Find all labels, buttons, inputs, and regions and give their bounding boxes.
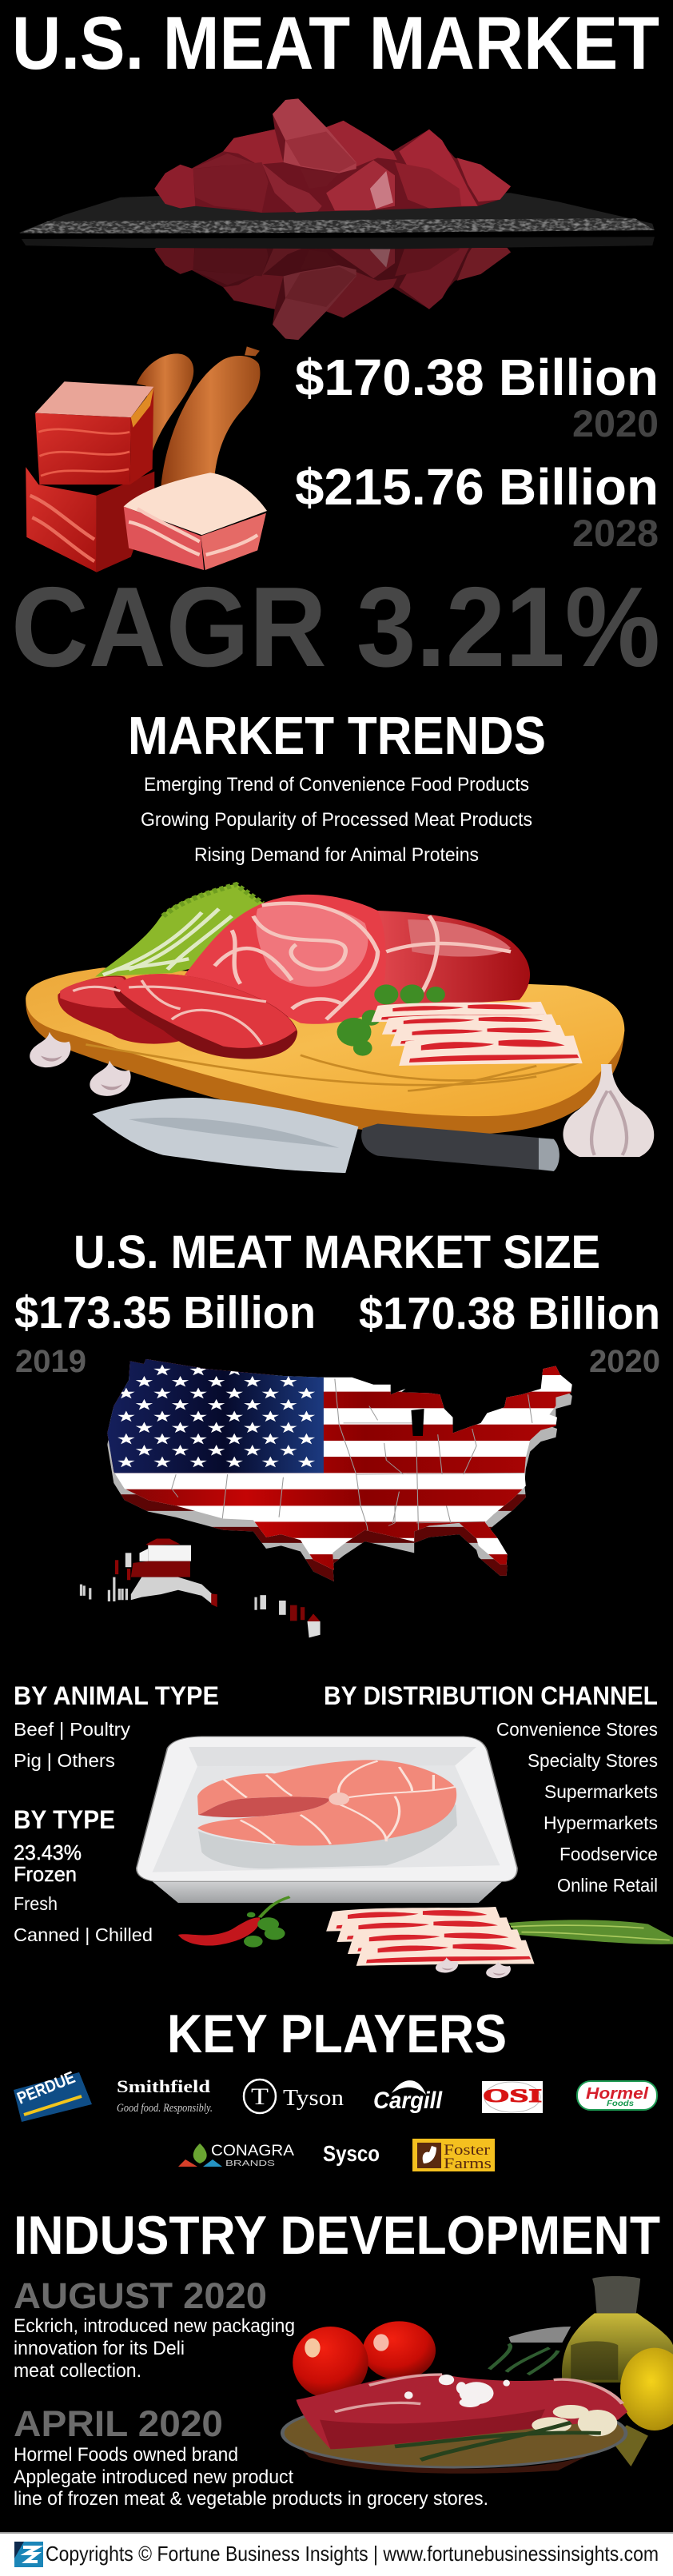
- panel: by distribution channel: Specialty Stores: [528, 1750, 658, 1771]
- logo: Foster Farms: Farms: [444, 2155, 492, 2172]
- garlic bulb: [563, 1064, 654, 1157]
- logo: Smithfield: Good food. Responsibly.: [117, 2102, 213, 2115]
- heading: market trends: MARKET TRENDS: [128, 706, 546, 766]
- logo: OSI: [482, 2081, 543, 2113]
- 2028 label: 2028: [572, 512, 659, 554]
- garlic cloves: [436, 1957, 511, 1978]
- development: April 2020: [14, 2403, 488, 2510]
- Hawaii: [254, 1595, 321, 1637]
- herbs: [489, 2344, 558, 2375]
- 2019 label: 2019: [15, 1344, 86, 1379]
- panel: by type: Fresh: [14, 1893, 58, 1914]
- garlic cloves: [30, 1032, 131, 1096]
- logo: Hormel Foods: Hormel: [586, 2085, 649, 2103]
- logo: Foster Farms: [412, 2139, 495, 2172]
- development: August 2020: meat collection.: [14, 2360, 141, 2382]
- trend list: Emerging Trend of Convenience Food Products: [144, 774, 529, 796]
- logo: Tyson: T: [251, 2084, 269, 2110]
- lower meat cube: [26, 467, 154, 572]
- heading: market size: U.S. MEAT MARKET SIZE: [74, 1226, 600, 1278]
- upper meat cube: [35, 381, 153, 484]
- 2019 value: $173.35 Billion: [14, 1287, 316, 1338]
- lemon: [620, 2348, 673, 2430]
- panel: by distribution channel: BY DISTRIBUTION CHANNEL: [324, 1681, 658, 1710]
- logo: Perdue: [14, 2068, 92, 2122]
- pork belly block: [124, 473, 267, 570]
- trend list: Growing Popularity of Processed Meat Products: [141, 809, 532, 831]
- logo: Sysco: Sysco: [323, 2141, 380, 2166]
- panel: by distribution channel: Supermarkets: [544, 1781, 658, 1802]
- panel: by type: BY TYPE: [14, 1805, 115, 1834]
- 2020 value: $170.38 Billion: [295, 349, 659, 406]
- sausage front: [161, 346, 260, 487]
- panel: by distribution channel: [324, 1681, 658, 1896]
- development: August 2020: Eckrich, introduced new packaging: [14, 2315, 295, 2337]
- logo: Tyson: Tyson: [283, 2086, 344, 2111]
- 2020 label: 2020: [589, 1344, 660, 1379]
- roast: [185, 895, 530, 1024]
- panel: by animal type: Pig | Others: [14, 1750, 115, 1771]
- panel: by animal type: BY ANIMAL TYPE: [14, 1681, 219, 1710]
- illustration: sausages, meat cubes and pork belly: [26, 346, 267, 572]
- logo: Perdue: PERDUE: [14, 2068, 78, 2108]
- panel: by distribution channel: Online Retail: [557, 1875, 658, 1896]
- flag fill: [103, 1358, 579, 1580]
- olive oil bottle: [508, 2276, 673, 2383]
- coarse salt: [404, 2375, 510, 2407]
- development: August 2020: AUGUST 2020: [14, 2275, 267, 2316]
- garlic cloves: [532, 2405, 617, 2436]
- development: April 2020: Applegate introduced new product: [14, 2466, 293, 2488]
- 2020 label: 2020: [572, 402, 659, 445]
- bacon strips: [326, 1907, 535, 1966]
- photo: steak with tomatoes, oil and lemon: [282, 2276, 673, 2474]
- footer band: [0, 2532, 673, 2576]
- parsley: [244, 1912, 285, 1948]
- 2020 value: $170.38 Billion: [359, 1288, 660, 1339]
- rosemary sprig: [395, 2422, 601, 2460]
- development: August 2020: [14, 2275, 295, 2382]
- salmon: [197, 1760, 457, 1868]
- logo: Smithfield: [117, 2076, 213, 2115]
- Alaska: [81, 1538, 217, 1607]
- logo: Foster Farms: Foster: [444, 2142, 491, 2159]
- illustration: salmon steak in tray: [137, 1737, 673, 1978]
- tray: [137, 1737, 517, 1903]
- logo: Cargill: Cargill: [373, 2088, 443, 2114]
- meat slices: [58, 974, 297, 1059]
- heading: key players: KEY PLAYERS: [167, 2004, 507, 2064]
- tomatoes: [293, 2321, 436, 2399]
- asparagus: [508, 1920, 673, 1944]
- 2028 value: $215.76 Billion: [295, 458, 659, 516]
- logo: Hormel Foods: [577, 2081, 657, 2110]
- development: April 2020: Hormel Foods owned brand: [14, 2444, 238, 2466]
- development: August 2020: innovation for its Deli: [14, 2338, 185, 2359]
- footer logo: [14, 2542, 43, 2567]
- logo: OSI: OSI: [483, 2086, 542, 2106]
- map: Alaska and Hawaii insets: [81, 1538, 321, 1637]
- sausage back: [137, 353, 193, 452]
- trend list: Rising Demand for Animal Proteins: [194, 844, 479, 866]
- panel: by distribution channel: Hypermarkets: [544, 1812, 658, 1833]
- steak: [297, 2374, 627, 2449]
- development: April 2020: line of frozen meat & vegetable products in grocery stores.: [14, 2488, 488, 2510]
- map: United States flag map: [103, 1358, 579, 1588]
- knife: [92, 1098, 560, 1173]
- panel: by distribution channel: Convenience Stores: [496, 1719, 658, 1740]
- logo: Smithfield: Smithfield: [117, 2076, 210, 2096]
- parsley: [337, 984, 445, 1056]
- lettuce: [95, 884, 264, 977]
- bacon strips: [372, 1002, 583, 1066]
- panel: by type: [14, 1805, 153, 1945]
- logo: Conagra Brands: CONAGRA: [211, 2143, 294, 2159]
- logo: Tyson: [244, 2080, 344, 2113]
- development: April 2020: APRIL 2020: [14, 2403, 223, 2444]
- board: [26, 967, 624, 1135]
- panel: by distribution channel: Foodservice: [560, 1844, 658, 1864]
- logo: Hormel Foods: Foods: [607, 2099, 634, 2108]
- map extrusion: [107, 1394, 572, 1581]
- plate: [282, 2399, 626, 2474]
- logo: Conagra Brands: BRANDS: [225, 2159, 275, 2168]
- panel: by animal type: Beef | Poultry: [14, 1719, 131, 1740]
- logos: key players: [14, 2068, 657, 2172]
- illustration: cutting board with meat, knife and garlic: [26, 884, 654, 1173]
- image: raw meat on slate with reflection: [19, 98, 655, 340]
- panel: by type: 23.43%: [14, 1840, 82, 1864]
- logo: Conagra Brands: [178, 2143, 294, 2168]
- panel: by type: Frozen: [14, 1862, 77, 1886]
- trend list: [141, 774, 532, 866]
- chili pepper: [178, 1897, 289, 1946]
- panel: by type: Canned | Chilled: [14, 1924, 153, 1945]
- panel: by animal type: [14, 1681, 219, 1771]
